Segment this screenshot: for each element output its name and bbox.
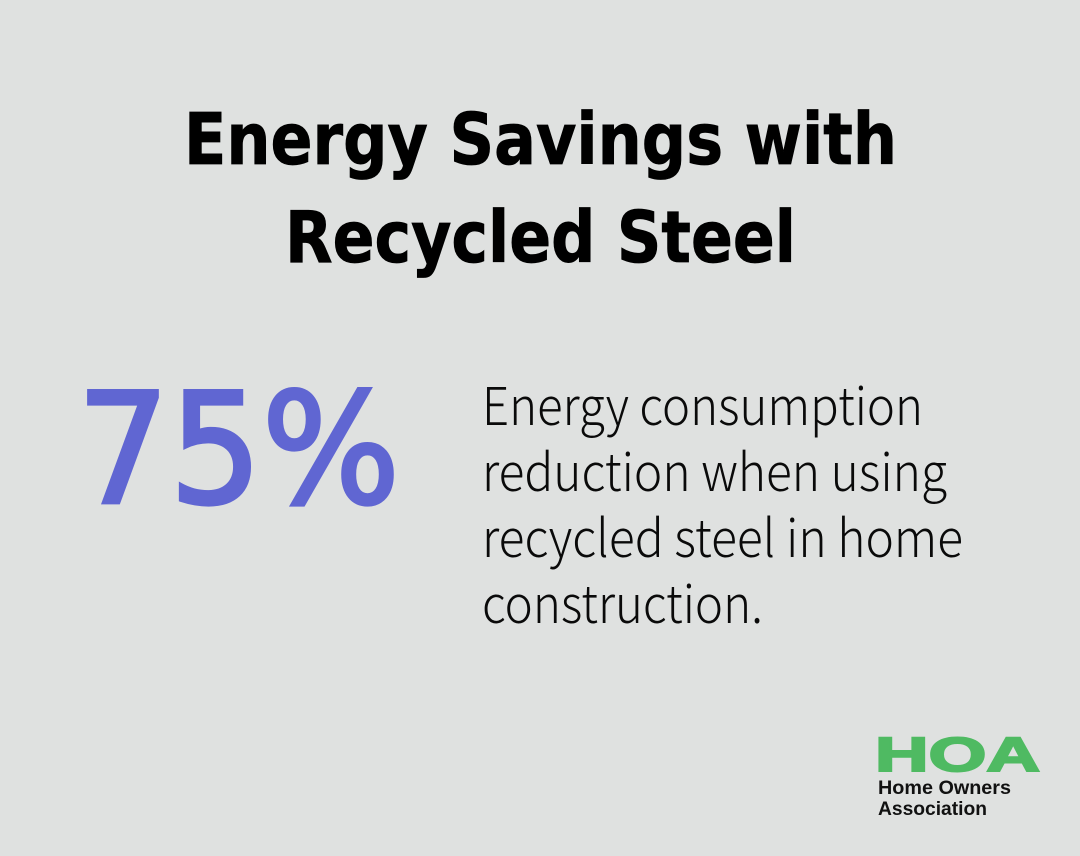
logo: Home Owners Association — [875, 728, 1040, 820]
logo wordmark: HOA: HOA — [875, 728, 1040, 782]
title: Recycled Steel — [285, 196, 796, 279]
logo text: Home Owners: Home Owners — [878, 778, 1011, 799]
title: Energy Savings with — [184, 98, 897, 181]
logo text: Association: Association — [878, 799, 987, 820]
description text: reduction when using — [482, 431, 947, 506]
description text: recycled steel in home — [482, 497, 963, 572]
statistic: 75%: 75% — [77, 362, 400, 540]
description text — [482, 365, 963, 638]
description text: Energy consumption — [482, 365, 923, 440]
description text: construction. — [482, 563, 763, 638]
title — [184, 98, 897, 279]
